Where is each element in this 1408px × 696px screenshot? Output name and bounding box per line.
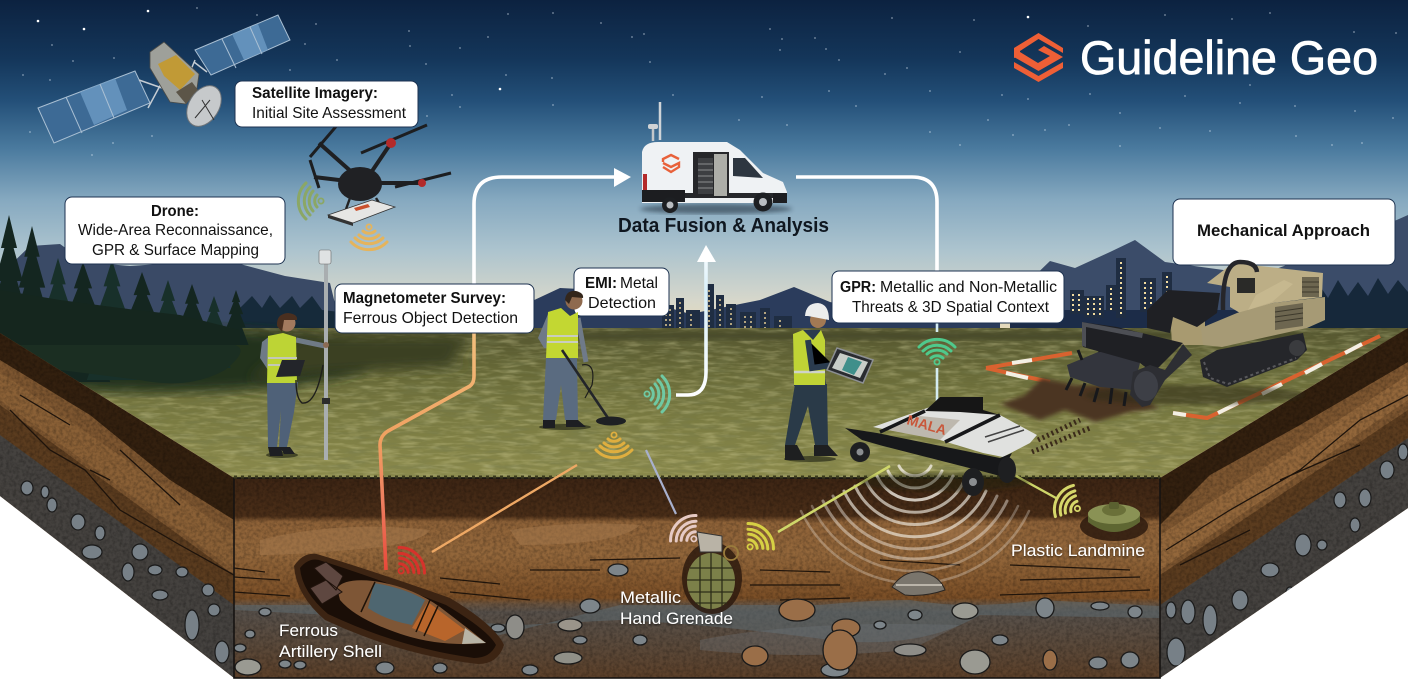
right soil face [1160,320,1408,680]
buried object under GPR [892,572,945,595]
arrowhead: emi [697,245,716,262]
person: magnetometer operator [260,250,331,460]
label: ferrous artillery shell: Artillery Shell [279,642,382,661]
signal line: emi route [676,262,706,395]
city skyline left [662,284,792,335]
label: magnetometer survey: Magnetometer Survey: [343,290,506,307]
starfield [23,8,1396,155]
city skyline right [1070,258,1172,318]
satellite [38,15,290,143]
left soil face [0,330,234,680]
signal line: left main route [380,177,614,570]
ground marker tape [986,336,1380,418]
label: mechanical approach: Mechanical Approach [1197,221,1370,240]
label: GPR [832,271,1064,323]
front soil cross-section [234,478,1160,678]
arrowhead to van [614,168,631,187]
city lights right [1073,262,1167,316]
label: magnetometer survey: Ferrous Object Detection [343,310,518,327]
label: drone: Wide-Area Reconnaissance, [78,222,273,239]
label: metallic hand grenade [620,588,733,628]
label: drone [65,197,285,264]
label: satellite imagery: Initial Site Assessment [252,105,407,122]
distant treeline right [1290,278,1408,345]
logo mark [1014,33,1063,82]
label: EMI [574,268,669,316]
signal icon: landmine [1049,482,1089,525]
signal icon: grenade right [736,518,779,561]
hand grenade [682,532,742,614]
label: EMI: EMI: [585,275,617,292]
label: GPR: Metallic and Non-Metallic [880,279,1057,296]
label: ferrous artillery shell [279,621,382,661]
bright stars [38,11,1028,89]
mechanical demining machine [1066,262,1325,407]
GPR robot cart [845,397,1037,496]
label: drone: GPR & Surface Mapping [92,242,259,259]
forest left [0,215,249,383]
label: ferrous artillery shell: Ferrous [279,621,338,640]
artillery shell [294,554,504,664]
signal line: GPR to landmine [1016,476,1056,498]
label: mechanical approach [1173,199,1395,265]
signal line: van to GPR [796,177,937,272]
signal icon: shell [387,542,430,585]
signal icon: drone side [298,183,324,219]
survey van [640,102,792,214]
label: metallic hand grenade: Metallic [620,588,682,607]
label: plastic landmine: Plastic Landmine [1011,541,1145,560]
label: drone: Drone: [151,203,199,220]
city lights left [666,290,780,333]
signal icon: EMI side [644,376,670,412]
label: magnetometer survey [335,284,534,333]
label: GPR: Threats & 3D Spatial Context [852,299,1050,316]
plastic landmine [1080,502,1148,541]
label: satellite imagery [235,81,418,127]
label: EMI: Detection [588,295,656,312]
signal icon: grenade left [665,510,708,553]
signal line: GPR down [936,322,938,403]
excavated dirt trail [1000,378,1160,452]
heading: data fusion: Data Fusion & Analysis [618,215,829,237]
drone [310,123,451,226]
sky background [0,0,1408,345]
person: EMI operator [538,291,626,430]
label: EMI: Metal [620,275,658,292]
signal icon: drone down [351,224,387,250]
distant trees behind field [240,295,345,345]
person: GPR operator [784,303,873,462]
signal icon: GPR [919,339,955,365]
signal line: ground to grenade [646,450,676,514]
signal line: GPR to grenade [778,466,890,532]
mountains [0,215,1408,345]
label: metallic hand grenade: Hand Grenade [620,609,733,628]
logo wordmark: Guideline Geo [1080,31,1378,84]
GPR robot cart: MALA [905,412,948,438]
label: satellite imagery: Satellite Imagery: [252,85,378,102]
jagged grass edge [234,476,1160,478]
GPR radar wave arcs [801,466,1029,583]
signal icon: EMI down [596,432,632,458]
grass surface [0,328,1408,480]
label: GPR: GPR: [840,279,876,296]
signal line: EMI ground to shell [432,465,577,552]
